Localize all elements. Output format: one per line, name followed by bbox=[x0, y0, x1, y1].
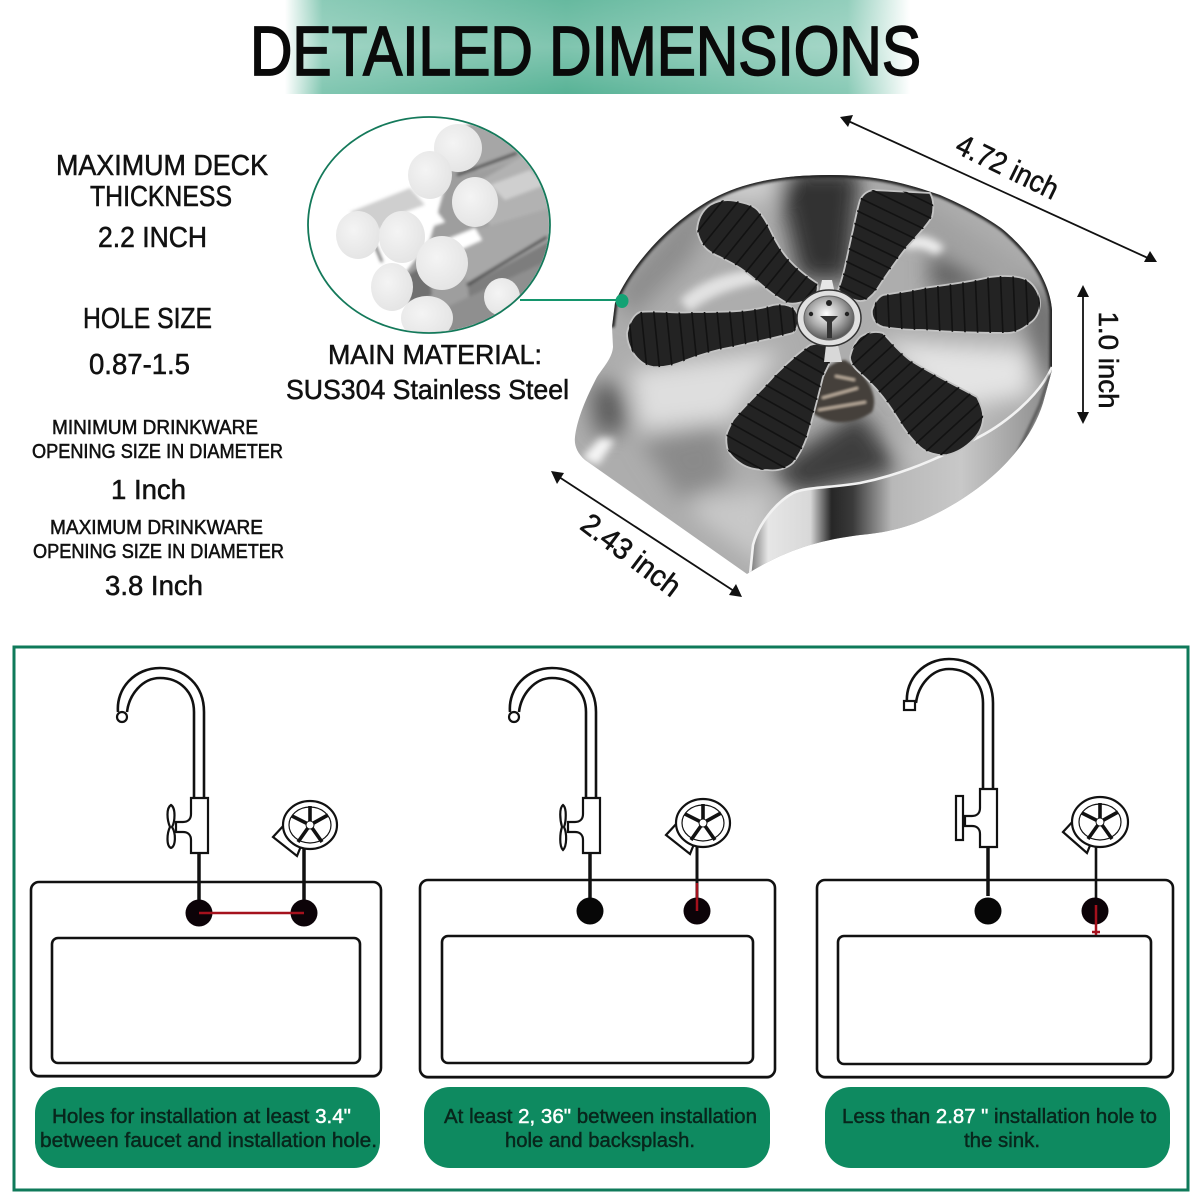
title: DETAILED DIMENSIONS bbox=[250, 12, 921, 90]
callout: faucet distance bbox=[35, 1087, 380, 1168]
arrow: 2.43 inch: 2.43 inch bbox=[574, 507, 687, 603]
mounting holes and distance line bbox=[974, 898, 1108, 935]
arrow: 4.72 inch bbox=[840, 115, 1157, 262]
arrow: 4.72 inch: 4.72 inch bbox=[950, 129, 1064, 206]
diagram: faucet to hole distance bbox=[31, 668, 381, 1078]
arrow: 1.0 inch: 1.0 inch bbox=[1093, 312, 1124, 408]
arrow: 2.43 inch bbox=[551, 471, 742, 603]
basin body bbox=[574, 175, 1052, 574]
icon: rinser bbox=[1063, 797, 1128, 903]
rim shadow bbox=[612, 175, 1052, 370]
material label: SUS304 Stainless Steel bbox=[286, 374, 569, 405]
mounting holes and distance line bbox=[186, 900, 318, 926]
callout: faucet distance: Holes for installation at least 3.4" bbox=[52, 1106, 351, 1128]
callout: backsplash distance: At least 2, 36" between installation bbox=[444, 1106, 757, 1128]
text block: specifications bbox=[32, 150, 284, 601]
rubber arm: left bbox=[627, 304, 800, 367]
panel: installation requirements bbox=[14, 647, 1188, 1190]
faucet bbox=[904, 659, 997, 896]
spec: minimum drinkware opening bbox=[32, 417, 283, 505]
diagram: hole to backsplash distance bbox=[420, 668, 775, 1079]
arrow: 1.0 inch bbox=[1077, 285, 1124, 424]
rubber arm: right bbox=[872, 276, 1040, 333]
callout: sink distance bbox=[825, 1087, 1170, 1168]
spec: maximum drinkware opening bbox=[33, 517, 284, 601]
spec: maximum deck thickness: 2.2 INCH bbox=[98, 222, 207, 254]
spec: maximum deck thickness bbox=[56, 150, 269, 254]
title band bbox=[285, 0, 910, 94]
rubber arm: lower right bbox=[850, 332, 983, 455]
spec: minimum drinkware opening: MINIMUM DRINKWARE bbox=[52, 417, 258, 439]
icon: rinser bbox=[666, 799, 730, 905]
spec: maximum deck thickness: MAXIMUM DECK bbox=[56, 150, 269, 182]
callout: backsplash distance: hole and backsplash. bbox=[505, 1130, 695, 1152]
spec: hole size: HOLE SIZE bbox=[83, 303, 212, 335]
centre hub bbox=[797, 280, 861, 362]
diagram: hole to sink distance bbox=[817, 659, 1173, 1079]
callout: faucet distance: between faucet and installation hole. bbox=[40, 1130, 377, 1152]
front wall bbox=[750, 367, 1070, 575]
spec: maximum drinkware opening: OPENING SIZE IN DIAMETER bbox=[33, 541, 284, 563]
callout: sink distance: the sink. bbox=[964, 1130, 1040, 1152]
material label: MAIN MATERIAL: bbox=[328, 339, 542, 370]
spec: maximum deck thickness: THICKNESS bbox=[90, 181, 232, 213]
icon: rinser bbox=[273, 801, 337, 905]
sink bbox=[420, 880, 775, 1079]
callout: backsplash distance bbox=[424, 1087, 770, 1168]
leader line to material callout bbox=[520, 294, 628, 308]
callout: sink distance: Less than 2.87 " installation hole to bbox=[842, 1106, 1157, 1128]
icon: material closeup circle bbox=[307, 116, 551, 334]
faucet bbox=[117, 668, 208, 905]
drain bbox=[805, 360, 874, 422]
spec: hole size: 0.87-1.5 bbox=[89, 349, 190, 381]
spec: minimum drinkware opening: OPENING SIZE IN DIAMETER bbox=[32, 441, 283, 463]
mounting holes and distance line bbox=[576, 883, 710, 924]
material label bbox=[286, 339, 569, 405]
rubber arm: top left bbox=[697, 200, 818, 304]
rubber arm: lower left bbox=[726, 344, 834, 470]
spec: maximum drinkware opening: 3.8 Inch bbox=[105, 570, 203, 601]
faucet bbox=[509, 668, 600, 903]
product: stainless steel rinser bbox=[574, 175, 1052, 574]
sink bbox=[817, 880, 1173, 1079]
sink bbox=[31, 882, 381, 1078]
spec: maximum drinkware opening: MAXIMUM DRINKWARE bbox=[50, 517, 263, 539]
spec: minimum drinkware opening: 1 Inch bbox=[111, 474, 186, 505]
spec: hole size bbox=[83, 303, 212, 381]
rubber arm: top right bbox=[838, 190, 933, 301]
